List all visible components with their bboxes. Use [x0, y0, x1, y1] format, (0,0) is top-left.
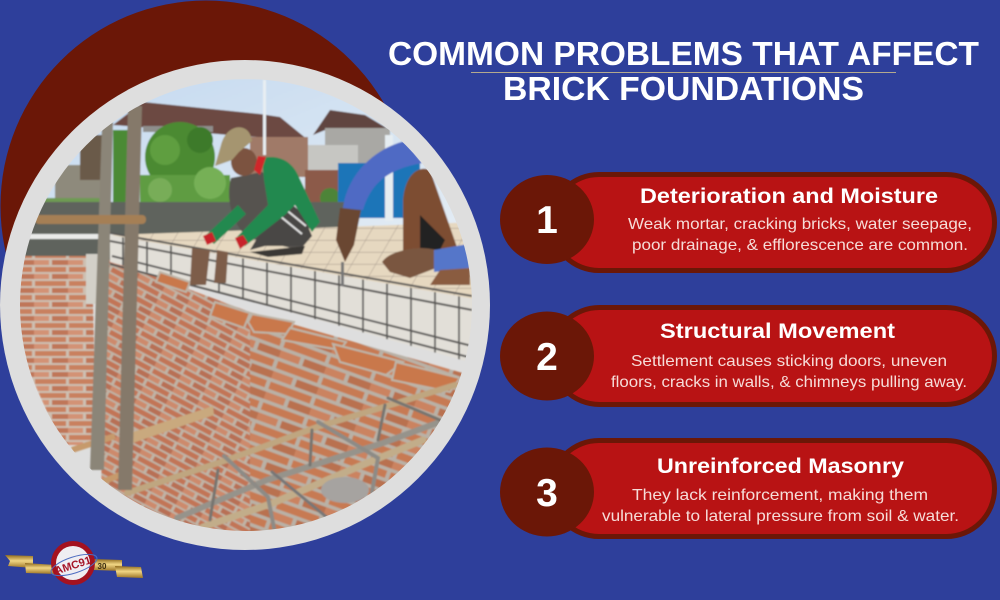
number badge 3: 3: [536, 472, 558, 515]
description 3: vulnerable to lateral pressure from soil & water.: [602, 508, 959, 525]
description 2: [611, 353, 967, 391]
logo: AMC91 ribbon badge: 30: [98, 562, 107, 571]
main brick wall: [100, 260, 462, 531]
description 3: [602, 487, 959, 525]
title: BRICK FOUNDATIONS: [503, 70, 864, 107]
number badge 2: 2: [536, 336, 558, 379]
left brick wall: [15, 256, 96, 445]
description 2: Settlement causes sticking doors, uneven: [631, 353, 947, 370]
dark red backdrop circle: [0, 0, 412, 412]
photo: workers building a brick foundation: [15, 79, 480, 560]
worker in green shirt: [190, 127, 320, 285]
pill background 2: [551, 308, 994, 404]
white concrete beam with rebar cage: [110, 233, 480, 365]
coping bricks on top of the wall: [156, 272, 460, 392]
rubble: [321, 477, 369, 503]
description 1: poor drainage, & efflorescence are common.: [632, 237, 968, 254]
title: COMMON PROBLEMS THAT AFFECT: [388, 35, 979, 72]
lower rebar cage: [127, 385, 455, 528]
description 1: Weak mortar, cracking bricks, water seepage,: [628, 216, 972, 233]
sky: [46, 79, 456, 226]
description 3: They lack reinforcement, making them: [632, 487, 928, 504]
dark mesh fence: [20, 202, 350, 260]
heading 3: Unreinforced Masonry: [657, 455, 904, 478]
panel: unreinforced masonry: [500, 440, 994, 536]
worker in blue sleeves: [336, 141, 470, 286]
heading 2: Structural Movement: [660, 320, 895, 343]
logo: AMC91 ribbon badge: AMC91: [53, 555, 93, 577]
wooden plank and lower left pipes: [72, 406, 214, 483]
title: [388, 35, 979, 107]
pill background 1: [551, 174, 994, 270]
description 1: [628, 216, 972, 254]
trees: [44, 121, 339, 204]
blue water tank: [338, 135, 420, 221]
description 2: floors, cracks in walls, & chimneys pulling away.: [611, 374, 967, 391]
building roofs and houses: [113, 80, 390, 202]
panel: structural movement: [500, 308, 994, 404]
panel: deterioration and moisture: [500, 174, 994, 270]
heading 1: Deterioration and Moisture: [640, 185, 938, 208]
number badge 1: 1: [536, 199, 558, 242]
photo frame ring: [0, 60, 490, 550]
tiled floor: [112, 222, 472, 299]
pill background 3: [551, 440, 994, 536]
number badge 2: [500, 312, 594, 400]
number badge 3: [500, 448, 594, 536]
scaffold poles: [35, 106, 146, 490]
number badge 1: [500, 175, 594, 264]
logo: AMC91 ribbon badge: [5, 541, 143, 585]
